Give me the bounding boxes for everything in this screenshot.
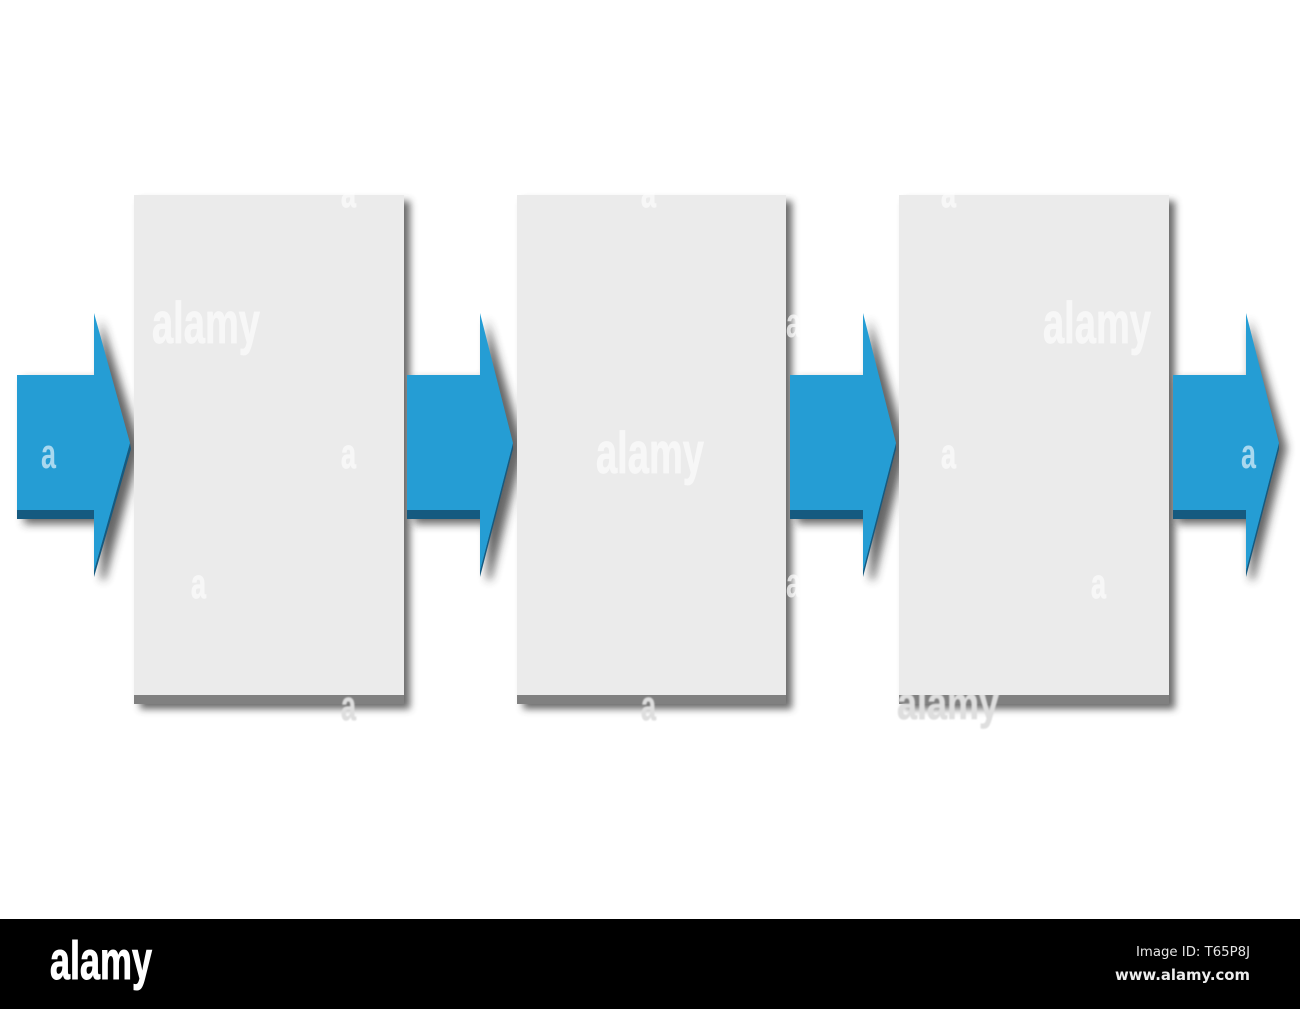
panel 1 bbox=[134, 169, 404, 729]
panel shadows bbox=[140, 201, 1175, 709]
panel 1: a bbox=[341, 430, 356, 477]
arrow 4 bbox=[1173, 313, 1287, 580]
panel shadows: a bbox=[786, 299, 801, 346]
footer logo: alamy bbox=[50, 931, 152, 991]
panel 1: alamy bbox=[152, 291, 260, 356]
panel 3: alamy bbox=[897, 677, 999, 729]
footer bar bbox=[0, 919, 1300, 1009]
panel 1: a bbox=[191, 560, 206, 607]
image id: Image ID: T65P8J bbox=[1136, 944, 1250, 960]
panel shadows: a bbox=[786, 559, 801, 606]
panel 3: alamy bbox=[1043, 291, 1151, 356]
arrow 2 bbox=[407, 313, 524, 580]
arrow 3 bbox=[790, 313, 907, 580]
panel 2 bbox=[517, 169, 786, 729]
panel 3: a bbox=[941, 169, 956, 216]
panel 1: a bbox=[341, 682, 356, 729]
arrow 1: a bbox=[41, 430, 56, 477]
arrow 4: a bbox=[1241, 430, 1256, 477]
panel 2: a bbox=[641, 682, 656, 729]
panel 3: a bbox=[1091, 560, 1106, 607]
panel 3 bbox=[897, 169, 1169, 729]
website url: www.alamy.com bbox=[1115, 966, 1250, 984]
panel 2: a bbox=[641, 169, 656, 216]
arrow 1 bbox=[17, 313, 141, 580]
panel 3: a bbox=[941, 430, 956, 477]
panel 2: alamy bbox=[596, 421, 704, 486]
panel 1: a bbox=[341, 169, 356, 216]
